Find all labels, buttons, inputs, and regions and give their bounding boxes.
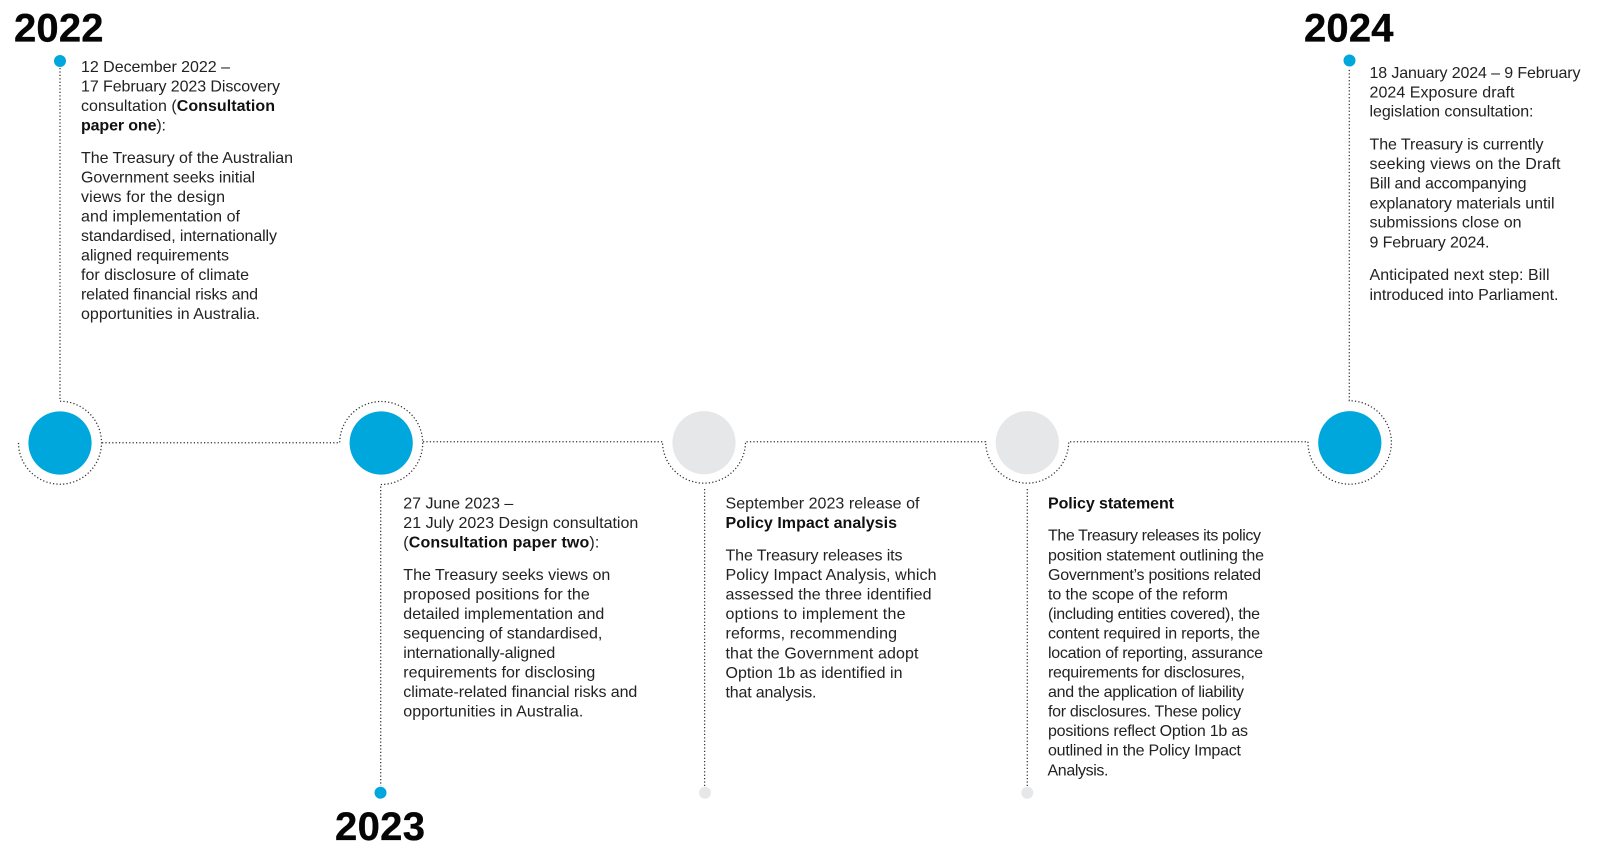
text block: policy statement: requirements for disclosures, — [1048, 664, 1245, 682]
text block: exposure draft consultation: introduced into Parliament. — [1370, 287, 1558, 304]
text block: design consultation: climate-related financial risks and — [403, 684, 637, 701]
text block: exposure draft consultation: Bill and accompanying — [1370, 176, 1526, 193]
text block: exposure draft consultation: 18 January 2024 – 9 February — [1370, 65, 1580, 82]
icon: policy statement marker dot — [1021, 787, 1033, 799]
icon: 2024 timeline node — [1318, 411, 1381, 474]
text block: policy statement: to the scope of the reform — [1048, 586, 1228, 604]
text block: policy statement: (including entities covered), the — [1048, 606, 1260, 623]
text block: exposure draft consultation: 9 February 2024. — [1370, 234, 1490, 251]
text block: discovery consultation: for disclosure of climate — [81, 267, 249, 284]
text block: discovery consultation: opportunities in Australia. — [81, 306, 260, 323]
icon: policy statement timeline node — [996, 411, 1059, 474]
text block: exposure draft consultation: legislation consultation: — [1370, 104, 1534, 120]
text block: discovery consultation: and implementation of — [81, 208, 241, 226]
heading: 2023: 2023 — [335, 805, 425, 849]
text block: policy impact analysis: September 2023 release of — [726, 496, 920, 512]
text block: design consultation — [403, 496, 638, 720]
text block: discovery consultation: related financial risks and — [81, 286, 258, 304]
icon: 2024 marker dot — [1344, 54, 1356, 66]
icon: policy impact timeline node — [672, 411, 736, 474]
text block: exposure draft consultation: seeking views on the Draft — [1370, 156, 1561, 173]
text block: policy statement: for disclosures. These policy — [1048, 704, 1241, 720]
text block: design consultation: requirements for disclosing — [403, 664, 595, 682]
text block: policy impact analysis: reforms, recommending — [726, 626, 897, 642]
text block: policy statement: location of reporting, assurance — [1048, 645, 1263, 662]
text block: exposure draft consultation: The Treasury is currently — [1370, 136, 1544, 153]
text block: design consultation: 21 July 2023 Design consultation — [403, 515, 638, 532]
text block: design consultation: The Treasury seeks views on — [403, 567, 610, 584]
panel: policy statement milestone — [996, 411, 1264, 799]
text block: policy statement: Policy statement — [1048, 496, 1175, 512]
heading: 2022: 2022 — [14, 7, 104, 51]
text block: policy impact analysis: options to implement the — [726, 606, 906, 623]
heading: 2024: 2024 — [1304, 7, 1394, 51]
text block: policy impact analysis: assessed the three identified — [726, 586, 932, 604]
text block: discovery consultation: 17 February 2023 Discovery — [81, 79, 280, 96]
text block: design consultation: 27 June 2023 – — [403, 496, 513, 512]
text block: policy statement: The Treasury releases its policy — [1048, 528, 1261, 545]
text block: discovery consultation: standardised, internationally — [81, 228, 277, 245]
text block: policy statement: outlined in the Policy Impact — [1048, 742, 1242, 760]
icon: 2022 marker dot — [54, 55, 66, 67]
panel: 2023 design consultation milestone — [335, 411, 638, 849]
text block: exposure draft consultation — [1370, 65, 1580, 304]
panel: policy impact analysis milestone — [672, 411, 936, 799]
icon: policy impact marker dot — [699, 787, 711, 799]
text block: discovery consultation: views for the design — [81, 189, 225, 206]
icon: 2023 timeline node — [350, 411, 413, 475]
text block: policy impact analysis: Policy Impact analysis — [726, 515, 897, 532]
text block: policy impact analysis: Option 1b as identified in — [726, 665, 902, 682]
text block: discovery consultation: consultation (Consultation — [81, 98, 275, 115]
text block: policy statement: content required in reports, the — [1048, 626, 1260, 642]
text block: policy statement: Analysis. — [1048, 762, 1108, 779]
text block: policy statement: and the application of liability — [1048, 684, 1244, 701]
timeline connector: dotted line and rings — [18, 68, 1391, 786]
text block: discovery consultation: aligned requirements — [81, 248, 229, 264]
text block: exposure draft consultation: submissions close on — [1370, 215, 1522, 232]
text block: policy impact analysis — [726, 496, 936, 702]
text block: exposure draft consultation: Anticipated next step: Bill — [1370, 267, 1550, 284]
text block: discovery consultation: The Treasury of the Australian — [81, 150, 293, 167]
icon: 2023 marker dot — [374, 787, 386, 799]
text block: discovery consultation — [81, 59, 293, 323]
text block: discovery consultation: Government seeks initial — [81, 170, 255, 186]
text block: policy impact analysis: that analysis. — [726, 684, 816, 702]
text block: policy impact analysis: that the Government adopt — [726, 646, 919, 662]
text block: policy statement: position statement outlining the — [1048, 547, 1264, 564]
icon: 2022 timeline node — [28, 411, 92, 475]
text block: design consultation: sequencing of standardised, — [403, 626, 602, 642]
text block: policy impact analysis: The Treasury releases its — [726, 548, 902, 564]
text block: policy impact analysis: Policy Impact Analysis, which — [726, 567, 936, 584]
text block: policy statement — [1048, 496, 1264, 779]
panel: 2022 milestone — [14, 7, 293, 475]
text block: design consultation: (Consultation paper two): — [403, 534, 599, 552]
text block: policy statement: Government’s positions related — [1048, 567, 1261, 584]
text block: design consultation: internationally-aligned — [403, 645, 555, 662]
text block: design consultation: detailed implementation and — [403, 606, 604, 623]
text block: discovery consultation: 12 December 2022 – — [81, 59, 230, 76]
text block: design consultation: proposed positions for the — [403, 586, 590, 604]
panel: 2024 milestone — [1304, 7, 1580, 474]
text block: discovery consultation: paper one): — [81, 118, 166, 134]
text block: exposure draft consultation: 2024 Exposure draft — [1370, 84, 1515, 101]
text block: exposure draft consultation: explanatory materials until — [1370, 195, 1554, 212]
text block: design consultation: opportunities in Australia. — [403, 704, 583, 720]
text block: policy statement: positions reflect Option 1b as — [1048, 723, 1248, 740]
